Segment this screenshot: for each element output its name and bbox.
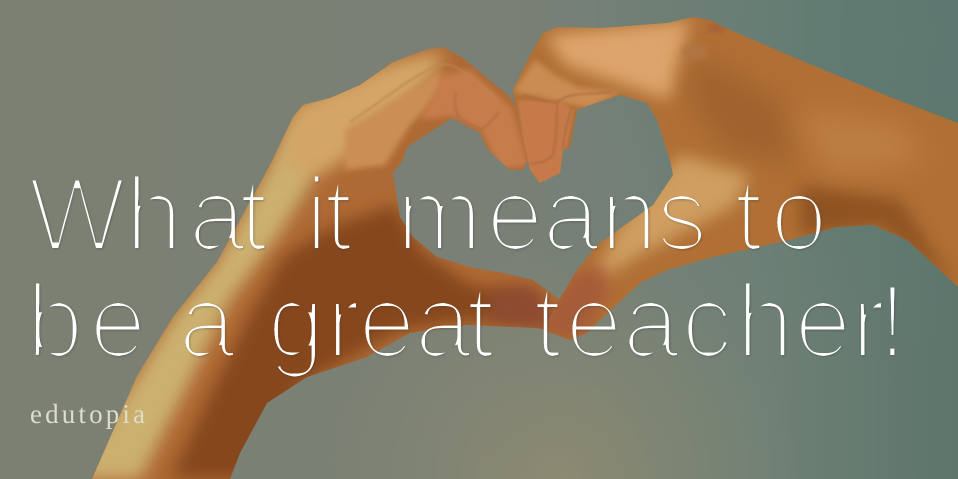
lower forearm shadow <box>795 182 949 276</box>
title <box>26 157 907 380</box>
knuckle dimple <box>711 24 723 32</box>
upper hand shadow <box>690 66 789 158</box>
curled fingers <box>513 60 620 108</box>
forearm highlight <box>808 116 910 172</box>
finger creases <box>523 92 612 163</box>
fingertip crease <box>455 92 499 130</box>
thumb base highlight <box>590 155 750 285</box>
thumb <box>535 265 610 340</box>
logo: edutopia: edutopia <box>30 399 145 429</box>
dark wrist and palm <box>170 205 535 479</box>
fingers <box>420 70 528 170</box>
title line 1: What it means to <box>28 157 828 273</box>
light edge of forearm <box>92 116 320 479</box>
photo: left hand <box>70 40 580 479</box>
back of hand highlight <box>285 50 443 175</box>
mid finger tone <box>345 72 445 170</box>
knuckle highlight <box>545 20 690 100</box>
thumb tip <box>488 281 554 329</box>
photo: right hand <box>500 10 958 350</box>
title line 2: be a great teacher! <box>26 264 907 380</box>
finger separation <box>350 64 465 122</box>
